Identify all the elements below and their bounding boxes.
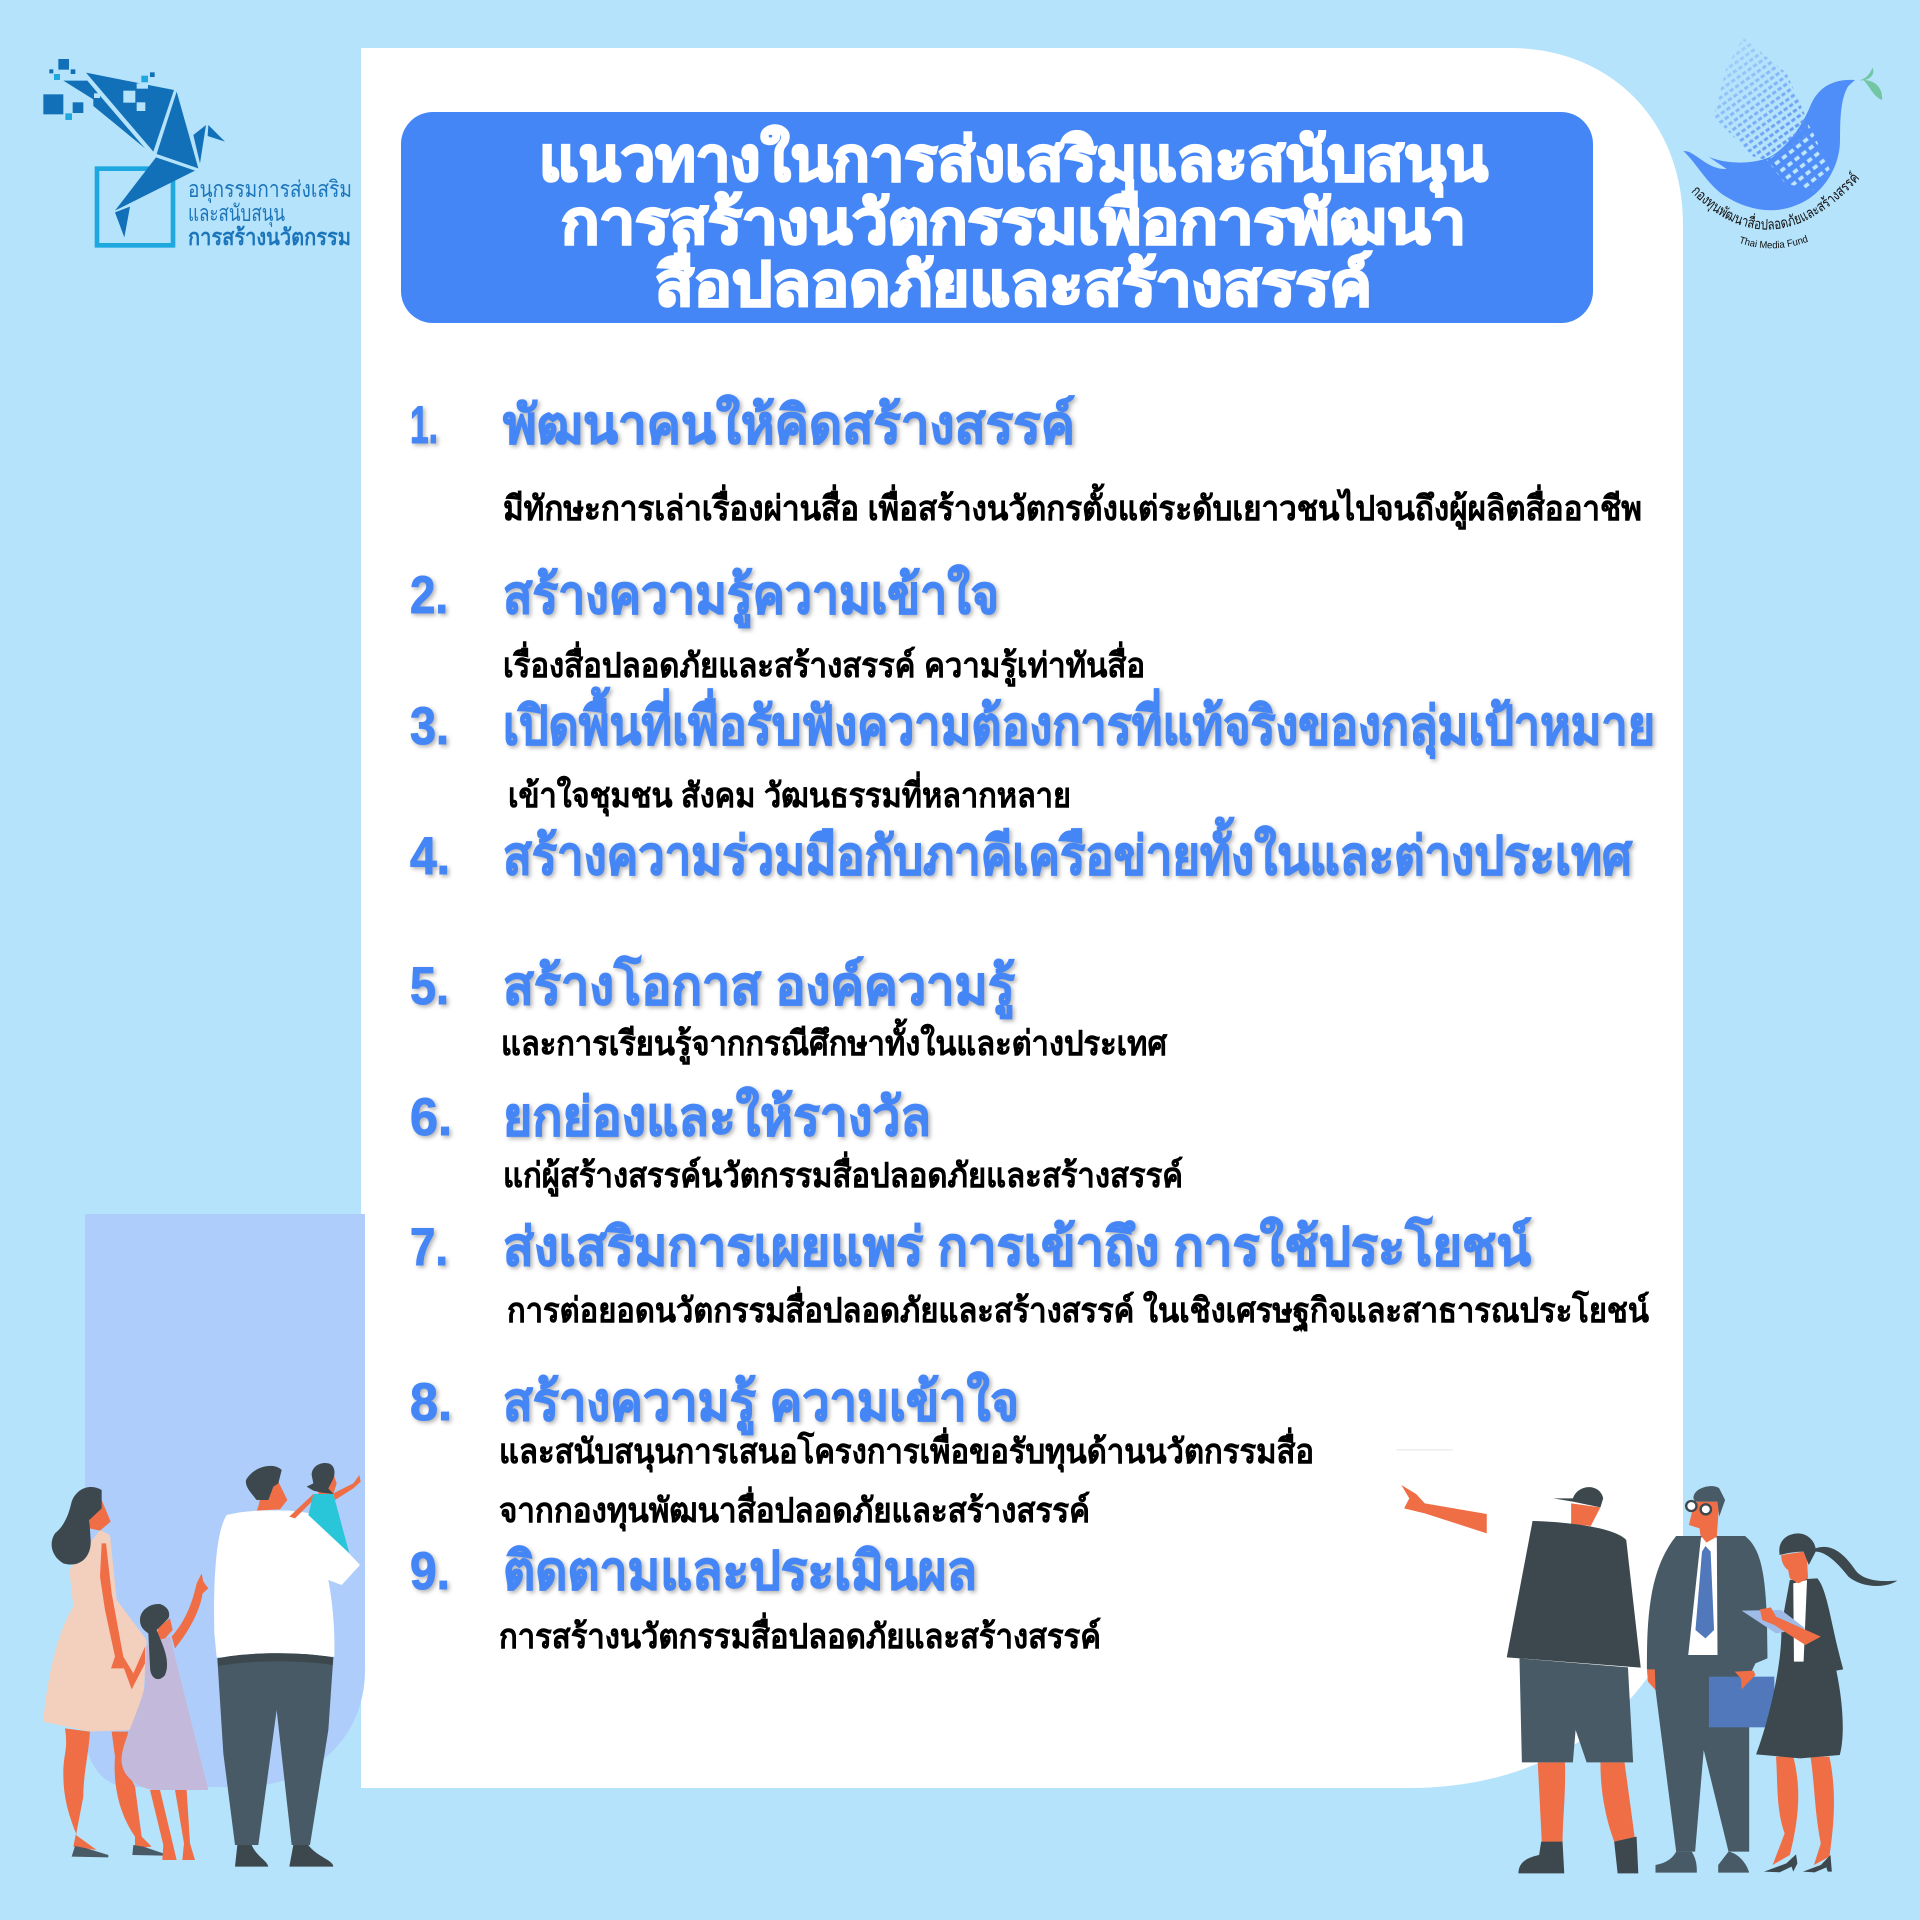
item 7: การต่อยอดนวัตกรรมสื่อปลอดภัยและสร้างสรรค์ ในเชิงเศรษฐกิจและสาธารณประโยชน์	[507, 1286, 1649, 1333]
item 5	[410, 955, 1167, 1065]
logo: innovation subcommittee: อนุกรรมการส่งเสริม	[188, 176, 352, 203]
item 8	[410, 1371, 1314, 1532]
man with cap pointing	[1401, 1485, 1646, 1873]
item 9: ติดตามและประเมินผล	[503, 1542, 977, 1601]
illustration: family	[43, 1463, 361, 1867]
item 6: แก่ผู้สร้างสรรค์นวัตกรรมสื่อปลอดภัยและสร้างสรรค์	[503, 1151, 1183, 1197]
item 1: พัฒนาคนให้คิดสร้างสรรค์	[503, 394, 1075, 455]
item 3: 3.	[410, 697, 449, 756]
item 1	[410, 394, 1642, 530]
toddler	[289, 1463, 361, 1553]
item 4: สร้างความร่วมมือกับภาคีเครือข่ายทั้งในและต่างประเทศ	[503, 817, 1633, 886]
item 6	[410, 1086, 1183, 1197]
item 7	[410, 1216, 1649, 1333]
item 3: เปิดพื้นที่เพื่อรับฟังความต้องการที่แท้จริงของกลุ่มเป้าหมาย	[503, 687, 1655, 759]
item 8: และสนับสนุนการเสนอโครงการเพื่อขอรับทุนด้านนวัตกรรมสื่อ	[499, 1427, 1314, 1473]
title: แนวทางในการส่งเสริมและสนับสนุน	[539, 125, 1488, 197]
item 5: 5.	[410, 957, 449, 1016]
item 7: ส่งเสริมการเผยแพร่ การเข้าถึง การใช้ประโยชน์	[503, 1216, 1532, 1277]
title: สื่อปลอดภัยและสร้างสรรค์	[655, 242, 1372, 318]
title	[539, 125, 1488, 318]
item 3: เข้าใจชุมชน สังคม วัฒนธรรมที่หลากหลาย	[508, 771, 1071, 817]
item 9: การสร้างนวัตกรรมสื่อปลอดภัยและสร้างสรรค์	[499, 1612, 1101, 1656]
item 5: สร้างโอกาส องค์ความรู้	[503, 955, 1015, 1019]
item 1: 1.	[410, 396, 438, 455]
father	[214, 1466, 360, 1867]
item 8: 8.	[410, 1373, 452, 1432]
item 7: 7.	[410, 1218, 448, 1277]
item 2: เรื่องสื่อปลอดภัยและสร้างสรรค์ ความรู้เท่าทันสื่อ	[503, 641, 1145, 687]
item 6: 6.	[410, 1088, 452, 1147]
mother	[43, 1487, 163, 1857]
item 9: 9.	[410, 1542, 450, 1601]
item 8: สร้างความรู้ ความเข้าใจ	[503, 1371, 1019, 1435]
panel: lavender backdrop	[85, 1214, 365, 1787]
item 3	[410, 687, 1655, 817]
item 1: มีทักษะการเล่าเรื่องผ่านสื่อ เพื่อสร้างนวัตกรตั้งแต่ระดับเยาวชนไปจนถึงผู้ผลิตสื่ออาชีพ	[503, 483, 1642, 530]
item 8: จากกองทุนพัฒนาสื่อปลอดภัยและสร้างสรรค์	[499, 1486, 1090, 1532]
logo: Thai Media Fund dove	[1684, 38, 1882, 248]
illustration: three adults	[1397, 1449, 1897, 1873]
logo: Thai Media Fund dove: Thai Media Fund	[1740, 234, 1808, 248]
item 5: และการเรียนรู้จากกรณีศึกษาทั้งในและต่างประเทศ	[501, 1018, 1167, 1065]
title: การสร้างนวัตกรรมเพื่อการพัฒนา	[561, 180, 1466, 256]
item 2: 2.	[410, 566, 448, 625]
logo: innovation subcommittee: และสนับสนุน	[188, 200, 285, 227]
item 6: ยกย่องและให้รางวัล	[503, 1086, 931, 1147]
girl	[122, 1573, 208, 1860]
item 4: 4.	[410, 827, 450, 886]
item 2	[410, 564, 1145, 687]
woman with tablet	[1742, 1533, 1897, 1872]
item 9	[410, 1542, 1101, 1656]
item 2: สร้างความรู้ความเข้าใจ	[503, 564, 999, 628]
panel: white content card	[361, 48, 1683, 1788]
man in suit	[1647, 1486, 1774, 1873]
logo: Thai Media Fund dove: กองทุนพัฒนาสื่อปลอดภัยและสร้างสรรค์	[1692, 170, 1860, 230]
logo: innovation subcommittee: การสร้างนวัตกรรม	[188, 224, 351, 250]
logo: innovation subcommittee	[43, 59, 352, 250]
header banner	[401, 112, 1593, 323]
